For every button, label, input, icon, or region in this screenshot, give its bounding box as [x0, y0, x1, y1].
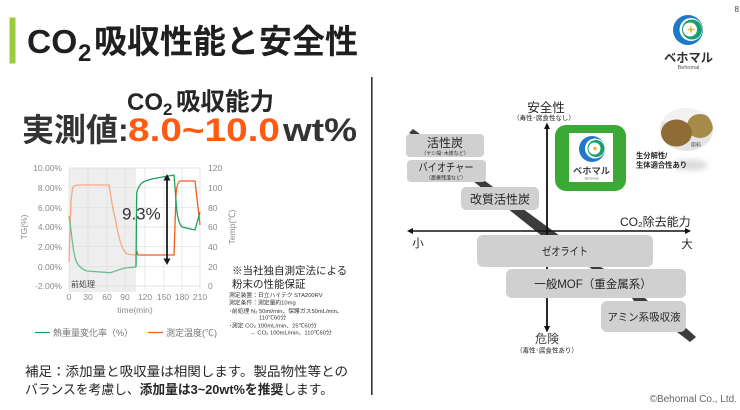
supplementary note: バランスを考慮し、添加量は3~20wt%を推奨します。: [25, 381, 333, 397]
soft shadow under note: [672, 160, 708, 170]
line chart: TG and temperature: [19, 163, 237, 338]
measurement conditions: ･測定 CO₂ 100mL/min、25℃60分: [229, 322, 317, 330]
x axis labels: [67, 292, 207, 302]
box: activated carbon: [406, 134, 484, 157]
box: biochar: （農業残渣など）: [426, 174, 466, 182]
subheading: CO2 absorption capacity: 吸収能力: [176, 88, 274, 116]
axis label: large: 大: [681, 237, 693, 251]
subheading: CO2 absorption capacity: [127, 88, 274, 119]
axis label: safety: （毒性･腐食性なし）: [513, 113, 575, 122]
y axis labels: TG: 2.00%: [38, 242, 62, 252]
TG curve, measurement: [136, 175, 200, 267]
x axis labels: 30: [83, 292, 93, 302]
title: [27, 23, 358, 67]
vertical divider: [371, 77, 373, 395]
green Behomal card: ベホマル: [573, 166, 610, 176]
line chart: TG and temperature: TG(%): [19, 214, 29, 240]
y axis labels: temperature: 120: [208, 163, 222, 173]
y axis labels: temperature: 20: [208, 262, 218, 272]
x axis labels: 180: [175, 292, 189, 302]
box: general MOF: [506, 269, 686, 298]
y axis labels: temperature: 40: [208, 242, 218, 252]
box: biochar: [407, 160, 486, 182]
y axis labels: temperature: [208, 163, 222, 291]
axis: safety vertical arrow: [544, 122, 550, 332]
box: zeolite: ゼオライト: [542, 245, 588, 258]
axis: CO2 removal horizontal arrow: [407, 228, 691, 234]
temperature curve, measurement: [136, 181, 200, 255]
subheading: CO2 absorption capacity: CO: [127, 89, 163, 116]
x axis labels: 120: [138, 292, 152, 302]
biodegradability note: 生分解性/: [636, 151, 667, 160]
y axis labels: TG: 4.00%: [38, 222, 62, 232]
title: 2: [78, 40, 91, 67]
measurement conditions: [229, 291, 343, 336]
x axis labels: 60: [102, 292, 112, 302]
box: amine absorbent: アミン系吸収液: [607, 312, 681, 324]
box: activated carbon: 活性炭: [427, 136, 463, 150]
green Behomal card: [555, 125, 626, 191]
measurement conditions: ･前処理 N₂ 50ml/min、保護ガス50mL/min、: [229, 307, 343, 315]
supplementary note: 補足：添加量と吸収量は相関します。製品物性等との: [25, 363, 348, 379]
legend: 熱重量変化率（%）: [53, 327, 133, 338]
box: zeolite: [477, 235, 653, 267]
measurement conditions: 測定条件：測定量約10mg: [229, 298, 296, 306]
note: proprietary measurement: [232, 264, 347, 290]
y axis labels: TG: 8.00%: [38, 183, 62, 193]
x axis labels: 90: [120, 292, 130, 302]
x axis labels: 210: [193, 292, 207, 302]
supplementary note: [25, 363, 348, 397]
headline: measured value: 8.0~10.0: [128, 112, 280, 148]
axis label: danger: （毒性･腐食性あり）: [516, 346, 578, 354]
y axis labels: temperature: 100: [208, 183, 222, 193]
axis label: CO2 removal capacity: CO₂除去能力: [620, 215, 691, 229]
legend: 測定温度(℃): [166, 327, 217, 338]
page number: 8: [735, 5, 740, 14]
double arrow: 9.3%: [164, 174, 170, 265]
green Behomal card: Behomal: [585, 176, 599, 180]
box: modified activated carbon: [461, 187, 539, 210]
biodegradability note: [636, 151, 687, 170]
y axis labels: temperature: 0: [208, 281, 213, 291]
measurement conditions: → CO₂ 100mL/min、110℃60分: [250, 328, 332, 336]
x axis labels: 0: [67, 292, 72, 302]
subheading: CO2 absorption capacity: 2: [163, 100, 172, 119]
temperature curve, pretreatment: [69, 185, 136, 262]
raw material photo: potatoes: 原料: [691, 142, 701, 148]
axis label: danger: 危険: [535, 332, 559, 346]
biodegradability note: 生体適合性あり: [636, 160, 687, 170]
line chart: TG and temperature: Temp(℃): [227, 209, 237, 244]
axis label: danger: [516, 332, 578, 354]
headline: measured value: 実測値:: [22, 112, 129, 148]
y axis labels: TG: 6.00%: [38, 203, 62, 213]
logo: top right: Behomal: [678, 65, 699, 71]
value label: 9.3%: 9.3%: [122, 204, 161, 224]
y axis labels: temperature: 80: [208, 203, 218, 213]
box: modified activated carbon: 改質活性炭: [470, 192, 530, 206]
x axis labels: 150: [157, 292, 171, 302]
legend: [35, 327, 217, 338]
y axis labels: TG: 0.00%: [38, 262, 62, 272]
box: amine absorbent: [601, 301, 686, 332]
headline: measured value: [22, 112, 357, 148]
y axis labels: TG: -2.00%: [35, 281, 62, 291]
note: proprietary measurement: ※当社独自測定法による: [232, 264, 347, 277]
y axis labels: TG: [33, 163, 62, 291]
copyright: ©Behomal Co., Ltd.: [650, 394, 737, 405]
box: general MOF: 一般MOF（重金属系）: [534, 277, 652, 291]
note: proprietary measurement: 粉末の性能保証: [232, 278, 306, 290]
TG curve, pretreatment: [69, 216, 136, 273]
headline: measured value: wt%: [282, 112, 357, 148]
title: CO: [27, 24, 77, 61]
title accent bar: [10, 18, 16, 64]
measurement conditions: 測定装置：日立ハイテク STA200RV: [229, 291, 323, 299]
logo: top right: ベホマル: [664, 51, 713, 65]
measurement conditions: 110℃60分: [259, 314, 286, 322]
title: 吸収性能と安全性: [94, 23, 358, 60]
y axis labels: temperature: 60: [208, 222, 218, 232]
axis label: small: 小: [412, 237, 424, 250]
logo: top right: [664, 15, 713, 71]
pretreatment label: 前処理: [71, 279, 95, 289]
raw material photo: potatoes: [660, 108, 714, 151]
y axis labels: TG: 10.00%: [33, 163, 62, 173]
diagonal band: [409, 129, 696, 342]
axis titles: time(min): [117, 305, 153, 315]
box: activated carbon: （ヤシ殻･木炭など）: [421, 150, 469, 157]
box: biochar: バイオチャー: [418, 161, 474, 174]
axis label: safety: 安全性: [527, 101, 565, 115]
axis label: safety: [513, 101, 575, 122]
